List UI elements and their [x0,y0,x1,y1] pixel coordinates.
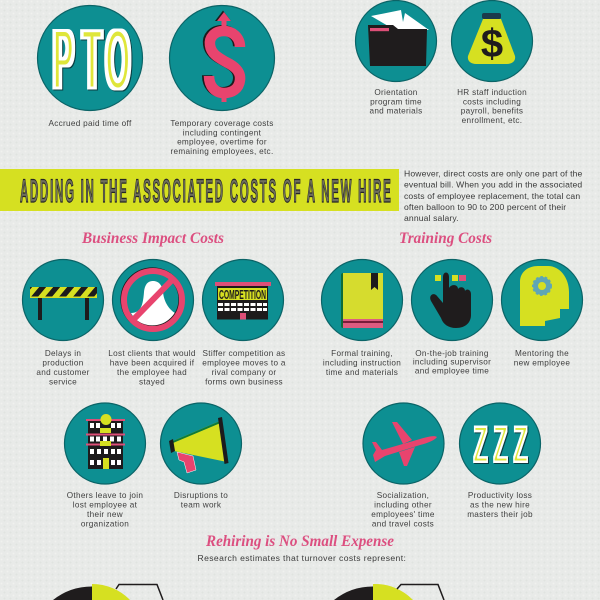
panel: orientation [356,0,436,116]
icon: airplane [363,403,444,484]
icon: no client sign [112,260,194,340]
text block: research intro: Research estimates that turnover costs represent: [198,553,406,563]
caption: team work [181,500,222,509]
text block: direct costs explanation: costs of employee replacement, the total can [404,191,580,201]
caption: enrollment, etc. [462,116,522,125]
caption: employee moves to a [202,358,286,367]
caption: new employee [514,358,570,367]
caption: Lost clients that would [108,349,196,358]
caption: organization [81,519,129,528]
caption: stayed [139,377,165,386]
caption: including instruction [323,358,401,367]
caption: costs including [463,97,521,106]
caption: including supervisor [413,358,491,367]
caption: the employee had [117,368,187,377]
caption: have been acquired if [110,358,195,367]
panel: disruptions [160,403,242,509]
banner: associated costs heading: ADDING IN THE ASSOCIATED COSTS OF A NEW HIRE [20,174,391,210]
text block: direct costs explanation: eventual bill. When you add in the associated [404,180,582,190]
caption: Temporary coverage costs [170,119,274,128]
icon: PTO circle: PTO [54,14,129,106]
panel: productivity loss [460,403,540,519]
text block: direct costs explanation: However, direct costs are only one part of the [404,168,582,178]
chart: right donut [334,584,444,600]
caption: Socialization, [377,491,429,500]
panel: HR induction [452,0,532,125]
caption: program time [370,97,422,106]
panel: mentoring [502,260,582,367]
chart: left donut [53,584,163,600]
panel: lost clients [108,260,196,386]
caption: employee, overtime for [177,138,267,147]
panel: temporary coverage [170,6,274,156]
caption: Delays in [45,349,81,358]
icon: head with gear [502,260,582,340]
caption: time and materials [326,368,398,377]
caption: On-the-job training [415,349,489,358]
panel: PTO cost [38,6,142,128]
panel: formal training [322,260,402,377]
caption: lost employee at [73,500,138,509]
caption: Formal training, [331,349,393,358]
panel: on-the-job training [412,260,492,375]
caption: Mentoring the [515,349,569,358]
caption: their new [87,510,123,519]
caption: as the new hire [470,500,530,509]
caption: remaining employees, etc. [170,147,274,156]
caption: Others leave to join [67,491,143,500]
caption: production [42,358,84,367]
panel: competition [202,260,286,386]
panel: socialization [363,403,444,528]
caption: and travel costs [372,519,434,528]
caption: including other [374,500,432,509]
icon: folder [356,0,436,82]
caption: HR staff induction [457,88,527,97]
icon: megaphone [160,403,242,484]
caption: employees' time [371,510,435,519]
text block: direct costs explanation: often balloon to 90 to 200 percent of their [404,202,566,212]
caption: rival company or [212,368,276,377]
caption: Disruptions to [174,491,228,500]
icon: road barrier [22,260,104,340]
caption: including contingent [183,128,262,137]
caption: Productivity loss [468,491,532,500]
heading: Rehiring is No Small Expense: Rehiring is No Small Expense [205,533,394,550]
panel: delays [22,260,104,386]
icon: dollar with arrow [170,6,274,110]
icon: pointing hand [412,260,492,340]
caption: service [49,377,77,386]
caption: masters their job [467,510,533,519]
icon: ZZZ: ZZZ [474,417,527,473]
caption: Orientation [374,88,418,97]
text block: direct costs explanation: annual salary. [404,213,459,223]
icon: office building [64,403,146,484]
icon: competition store: COMPETITION [219,287,266,302]
caption: and customer [36,368,90,377]
caption: and employee time [415,366,489,375]
icon: money bag: $ [481,22,503,66]
panel: others leave [64,403,146,528]
heading: Training Costs: Training Costs [399,230,492,247]
heading: Business Impact Costs: Business Impact Costs [81,230,224,247]
caption: Stiffer competition as [203,349,285,358]
icon: book [322,260,402,340]
caption: and materials [369,107,423,116]
caption: payroll, benefits [461,107,523,116]
caption: Accrued paid time off [48,119,132,128]
caption: forms own business [205,377,283,386]
